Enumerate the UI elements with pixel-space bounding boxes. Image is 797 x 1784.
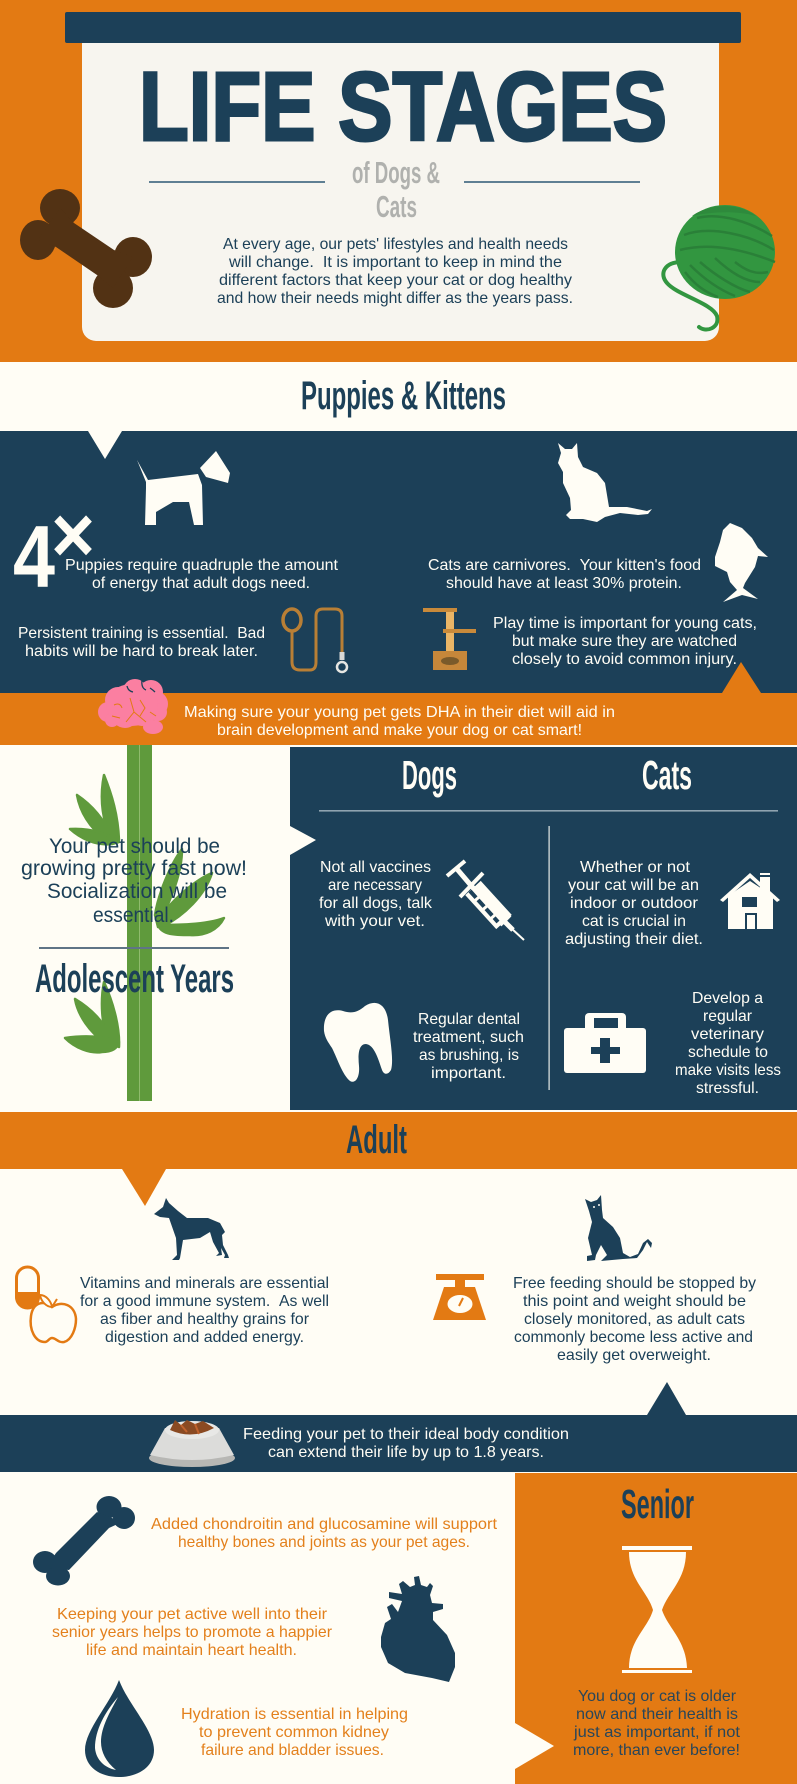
intro paragraph: [217, 236, 573, 307]
text: hydration: failure and bladder issues.: [201, 1742, 384, 1759]
panel: adolescent dogs and cats: [290, 747, 797, 1110]
text: indoor or outdoor: your cat will be an: [568, 877, 699, 894]
subtitle: of Dogs &: [352, 155, 440, 190]
text: vaccines: [319, 859, 433, 930]
text: vaccines: Not all vaccines: [320, 859, 431, 876]
intro paragraph: different factors that keep your cat or dog healthy: [219, 272, 572, 289]
icon: water drop: [85, 1680, 154, 1777]
text: dental: Regular dental: [418, 1011, 520, 1028]
heading: adolescent years: Adolescent Years: [35, 957, 234, 1001]
intro paragraph: At every age, our pets' lifestyles and health needs: [223, 236, 568, 253]
title: LIFE STAGES: [139, 52, 667, 161]
text: indoor or outdoor: [565, 859, 703, 948]
text: dental: as brushing, is: [419, 1047, 519, 1064]
icon: heart: [381, 1576, 455, 1682]
panel: header: [0, 0, 797, 362]
panel: senior: [515, 1473, 797, 1784]
icon: food bowl: [149, 1420, 235, 1467]
text: senior intro: now and their health is: [576, 1706, 738, 1723]
text: cats carnivores: [428, 557, 701, 592]
heading: cats: Cats: [642, 752, 692, 798]
text: play time: Play time is important for young cats,: [493, 615, 757, 632]
icon: white cat: [558, 443, 652, 522]
4x graphic: ×: [51, 490, 95, 579]
panel: adolescent left: [21, 745, 247, 1101]
text: indoor or outdoor: Whether or not: [580, 859, 691, 876]
text: vitamins: Vitamins and minerals are essential: [80, 1275, 329, 1292]
icon: bamboo: [65, 745, 224, 1101]
text: free feeding: this point and weight should be: [523, 1293, 746, 1310]
text: adolescent intro: Socialization will be: [47, 880, 227, 903]
text: indoor or outdoor: indoor or outdoor: [570, 895, 699, 912]
text: free feeding: easily get overweight.: [557, 1347, 711, 1364]
text: keeping active: senior years helps to promote a happier: [52, 1624, 333, 1641]
panel: adult header band: [0, 1112, 797, 1206]
text: DHA: [184, 704, 615, 739]
panel: DHA band: [0, 662, 797, 745]
text: free feeding: closely monitored, as adult cats: [524, 1311, 745, 1328]
heading: adult: Adult: [346, 1118, 407, 1162]
subtitle: Cats: [376, 189, 417, 224]
notch triangle: [88, 431, 122, 459]
text: DHA: Making sure your young pet gets DHA in their diet will aid in: [184, 704, 615, 721]
text: dental: [413, 1011, 524, 1082]
icon: adult dog silhouette: [154, 1198, 229, 1260]
text: senior intro: more, than ever before!: [573, 1742, 740, 1759]
text: vitamins: as fiber and healthy grains for: [100, 1311, 310, 1328]
text: senior intro: just as important, if not: [573, 1724, 741, 1741]
text: senior intro: [573, 1688, 741, 1759]
text: vitamins: for a good immune system. As well: [80, 1293, 329, 1310]
text: keeping active: Keeping your pet active well into their: [57, 1606, 328, 1623]
text: ideal body condition: Feeding your pet to their ideal body condition: [243, 1426, 569, 1443]
icon: house: [720, 873, 780, 929]
icon: brain: [98, 679, 168, 734]
text: puppy energy: [65, 557, 339, 592]
text: cats carnivores: Cats are carnivores. Your kitten's food: [428, 557, 701, 574]
text: chondroitin: [151, 1516, 498, 1551]
icon: tooth: [324, 1003, 392, 1082]
text: vet schedule: veterinary: [691, 1026, 764, 1043]
text: senior intro: You dog or cat is older: [578, 1688, 737, 1705]
text: indoor or outdoor: cat is crucial in: [582, 913, 686, 930]
notch triangle: [515, 1723, 554, 1769]
icon: syringe: [447, 861, 524, 940]
icon: hourglass: [622, 1546, 692, 1673]
icon: green yarn ball: [663, 205, 775, 330]
text: vet schedule: stressful.: [696, 1080, 759, 1097]
text: puppy energy: Puppies require quadruple the amount: [65, 557, 339, 574]
text: adolescent intro: Your pet should be: [49, 835, 220, 858]
text: chondroitin: healthy bones and joints as your pet ages.: [178, 1534, 470, 1551]
text: free feeding: Free feeding should be stopped by: [513, 1275, 756, 1292]
intro paragraph: will change. It is important to keep in mind the: [228, 254, 562, 271]
text: vet schedule: make visits less: [675, 1062, 781, 1079]
icon: dark bone: [33, 1496, 135, 1586]
header lid bar: [65, 12, 741, 43]
text: vitamins: [80, 1275, 329, 1346]
text: ideal body condition: can extend their life by up to 1.8 years.: [268, 1444, 544, 1461]
panel: puppies and kittens: [0, 431, 797, 693]
text: vet schedule: Develop a: [692, 990, 763, 1007]
text: play time: closely to avoid common injury.: [512, 651, 737, 668]
text: adolescent intro: growing pretty fast now!: [21, 857, 247, 880]
text: dental: important.: [431, 1065, 506, 1082]
text: dental: treatment, such: [413, 1029, 524, 1046]
icon: vitamin capsule and apple: [15, 1267, 76, 1342]
icon: white dog: [137, 451, 230, 525]
icon: white fish: [715, 523, 768, 602]
text: vaccines: for all dogs, talk: [319, 895, 433, 912]
text: DHA: brain development and make your dog or cat smart!: [217, 722, 582, 739]
notch triangle: [290, 826, 316, 855]
text: chondroitin: Added chondroitin and glucosamine will support: [151, 1516, 498, 1533]
text: cats carnivores: should have at least 30% protein.: [446, 575, 682, 592]
subtitle: [149, 155, 640, 224]
text: vet schedule: [675, 990, 781, 1097]
text: persistent training: Persistent training is essential. Bad: [18, 625, 265, 642]
text: vet schedule: schedule to: [688, 1044, 768, 1061]
text: play time: but make sure they are watched: [512, 633, 737, 650]
text: vaccines: are necessary: [328, 877, 422, 894]
icon: first aid kit: [564, 1013, 646, 1073]
text: vitamins: digestion and added energy.: [105, 1329, 304, 1346]
text: vaccines: with your vet.: [324, 913, 425, 930]
intro paragraph: and how their needs might differ as the years pass.: [217, 290, 573, 307]
heading: puppies and kittens: Puppies & Kittens: [301, 374, 506, 418]
text: persistent training: [18, 625, 265, 660]
text: hydration: [181, 1706, 408, 1759]
text: persistent training: habits will be hard to break later.: [25, 643, 258, 660]
text: free feeding: [513, 1275, 756, 1364]
heading: dogs: Dogs: [402, 752, 457, 798]
text: free feeding: commonly become less active and: [514, 1329, 753, 1346]
text: hydration: Hydration is essential in helping: [181, 1706, 408, 1723]
icon: brown bone: [20, 189, 152, 308]
text: adolescent intro: essential.: [93, 904, 174, 927]
heading: senior: Senior: [621, 1481, 694, 1527]
text: adolescent intro: [21, 835, 247, 927]
4x graphic: [13, 490, 95, 606]
text: puppy energy: of energy that adult dogs need.: [92, 575, 310, 592]
icon: leash: [283, 609, 347, 672]
icon: adult cat silhouette: [585, 1195, 652, 1261]
arrow triangle: [722, 662, 761, 693]
4x graphic: 4: [13, 507, 55, 606]
text: hydration: to prevent common kidney: [199, 1724, 389, 1741]
text: keeping active: life and maintain heart health.: [86, 1642, 297, 1659]
text: keeping active: [52, 1606, 333, 1659]
text: indoor or outdoor: adjusting their diet.: [565, 931, 703, 948]
icon: cat tree: [423, 608, 476, 670]
text: ideal body condition: [243, 1426, 569, 1461]
panel: feeding band: [0, 1382, 797, 1472]
text: vet schedule: regular: [703, 1008, 753, 1025]
text: play time: [493, 615, 757, 668]
icon: weight scale: [433, 1274, 486, 1320]
